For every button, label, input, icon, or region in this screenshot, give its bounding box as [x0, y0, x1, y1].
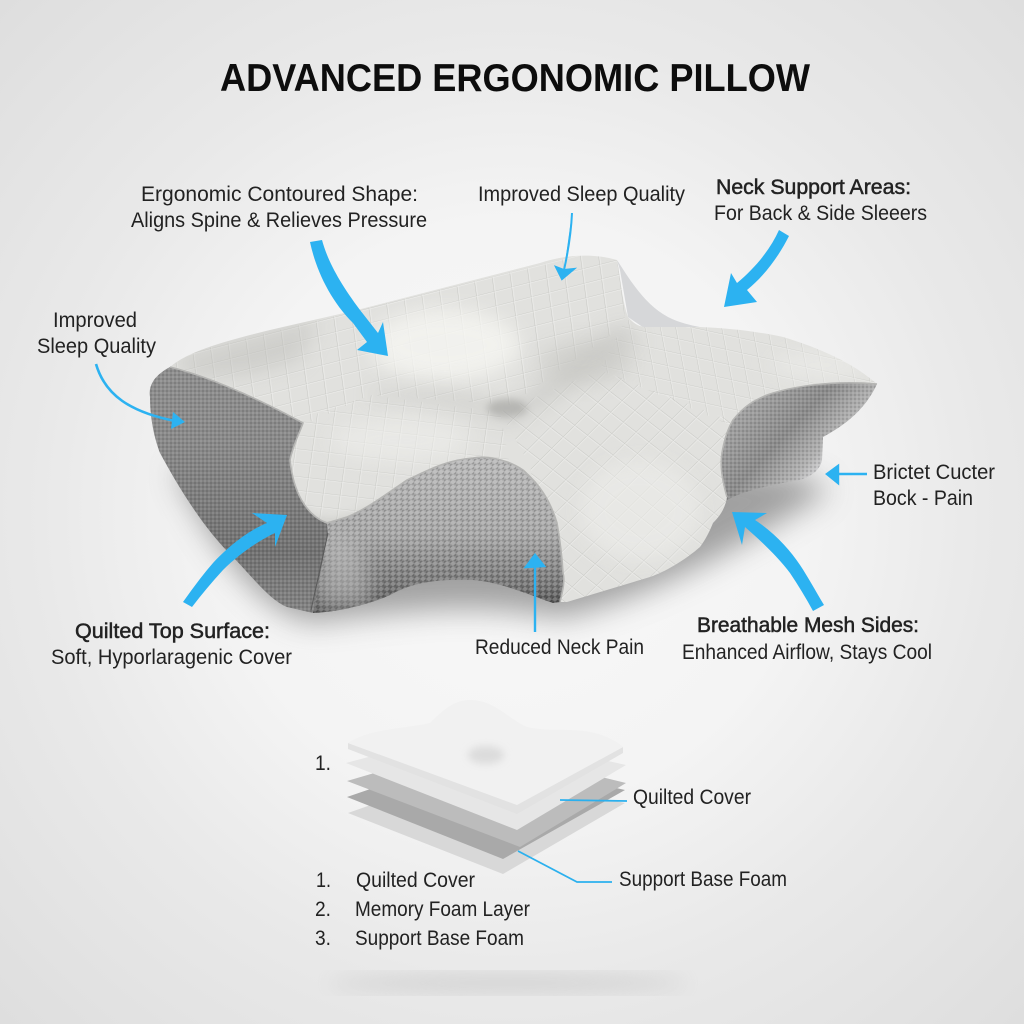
label: ergonomic contoured shape: Ergonomic Contoured Shape: — [141, 183, 418, 206]
callout: neck support areas: For Back & Side Sleeers — [714, 202, 927, 225]
callout: improved sleep quality top — [478, 183, 685, 279]
leader: support base foam — [518, 851, 787, 891]
callout: ergonomic contoured shape — [131, 183, 427, 356]
pillow illustration — [140, 240, 890, 622]
quilting right wing — [600, 320, 880, 425]
callout: quilted top surface — [51, 513, 292, 669]
numbered list: 2. — [315, 898, 331, 921]
layer: quilted cover side — [348, 743, 623, 814]
left mesh face — [150, 367, 328, 613]
shading and folds — [165, 309, 870, 560]
numbered list: 3. — [315, 927, 331, 950]
arrow: ergonomic contoured shape — [310, 240, 388, 356]
callout: improved sleep quality left — [37, 309, 185, 429]
arrow: improved sleep quality left — [96, 364, 185, 429]
bottom shadow — [328, 976, 688, 990]
layer: quilted cover top — [348, 700, 623, 805]
quilting front lobe — [291, 395, 509, 522]
piping edges — [170, 367, 877, 602]
callout: ergonomic contoured shape: Aligns Spine & Relieves Pressure — [131, 209, 427, 232]
pillow quilted top surface — [171, 256, 876, 602]
back mesh flap — [617, 260, 700, 330]
numbered list: Quilted Cover — [356, 869, 475, 892]
leader: quilted cover: Quilted Cover — [633, 786, 751, 809]
leader: support base foam: Support Base Foam — [619, 868, 787, 891]
label: improved sleep quality: Improved Sleep Quality — [478, 183, 685, 206]
front mesh face — [311, 457, 564, 613]
quilting diamond area — [500, 370, 735, 610]
callout: reduced neck pain — [475, 555, 644, 659]
arrow: breathable mesh sides — [732, 512, 824, 611]
callout: breathable mesh sides: Enhanced Airflow, Stays Cool — [682, 641, 932, 664]
callout: neck support areas — [714, 176, 927, 307]
callout: quilted top surface: Soft, Hyporlaragenic Cover — [51, 646, 292, 669]
label: breathable mesh sides: Breathable Mesh Sides: — [697, 614, 919, 637]
arrow: neck support areas — [724, 230, 789, 307]
layer: support base — [348, 770, 625, 874]
pillow ground shadow — [175, 450, 830, 622]
arrow: improved sleep quality — [556, 213, 574, 279]
label: reduced neck pain: Reduced Neck Pain — [475, 636, 644, 659]
number marker: 1. — [315, 752, 331, 775]
callout: bricket cucter — [827, 461, 995, 510]
label: neck support areas: Neck Support Areas: — [716, 176, 911, 199]
label: bricket cucter: Brictet Cucter — [873, 461, 995, 484]
title: ADVANCED ERGONOMIC PILLOW — [220, 57, 811, 100]
dimple — [468, 746, 504, 764]
layer: foam lower — [347, 755, 625, 859]
right mesh face — [721, 383, 877, 500]
layer: foam upper — [347, 745, 626, 847]
layer diagram — [346, 700, 626, 874]
arrow: quilted top surface — [183, 513, 287, 607]
quilting back lobe — [176, 256, 624, 422]
label: improved sleep quality left: Improved — [53, 309, 137, 332]
numbered list: Memory Foam Layer — [355, 898, 530, 921]
numbered list — [315, 869, 530, 950]
layer: thin white sheet — [346, 730, 626, 830]
callout: breathable mesh sides — [682, 512, 932, 664]
callout: bricket cucter: Bock - Pain — [873, 487, 973, 510]
arrow: bricket cucter — [827, 466, 867, 483]
label: quilted top surface: Quilted Top Surface: — [75, 620, 270, 643]
arrow: reduced neck pain — [526, 555, 544, 632]
numbered list: 1. — [316, 869, 331, 892]
numbered list: Support Base Foam — [355, 927, 524, 950]
callout: improved sleep quality left: Sleep Quality — [37, 335, 156, 358]
